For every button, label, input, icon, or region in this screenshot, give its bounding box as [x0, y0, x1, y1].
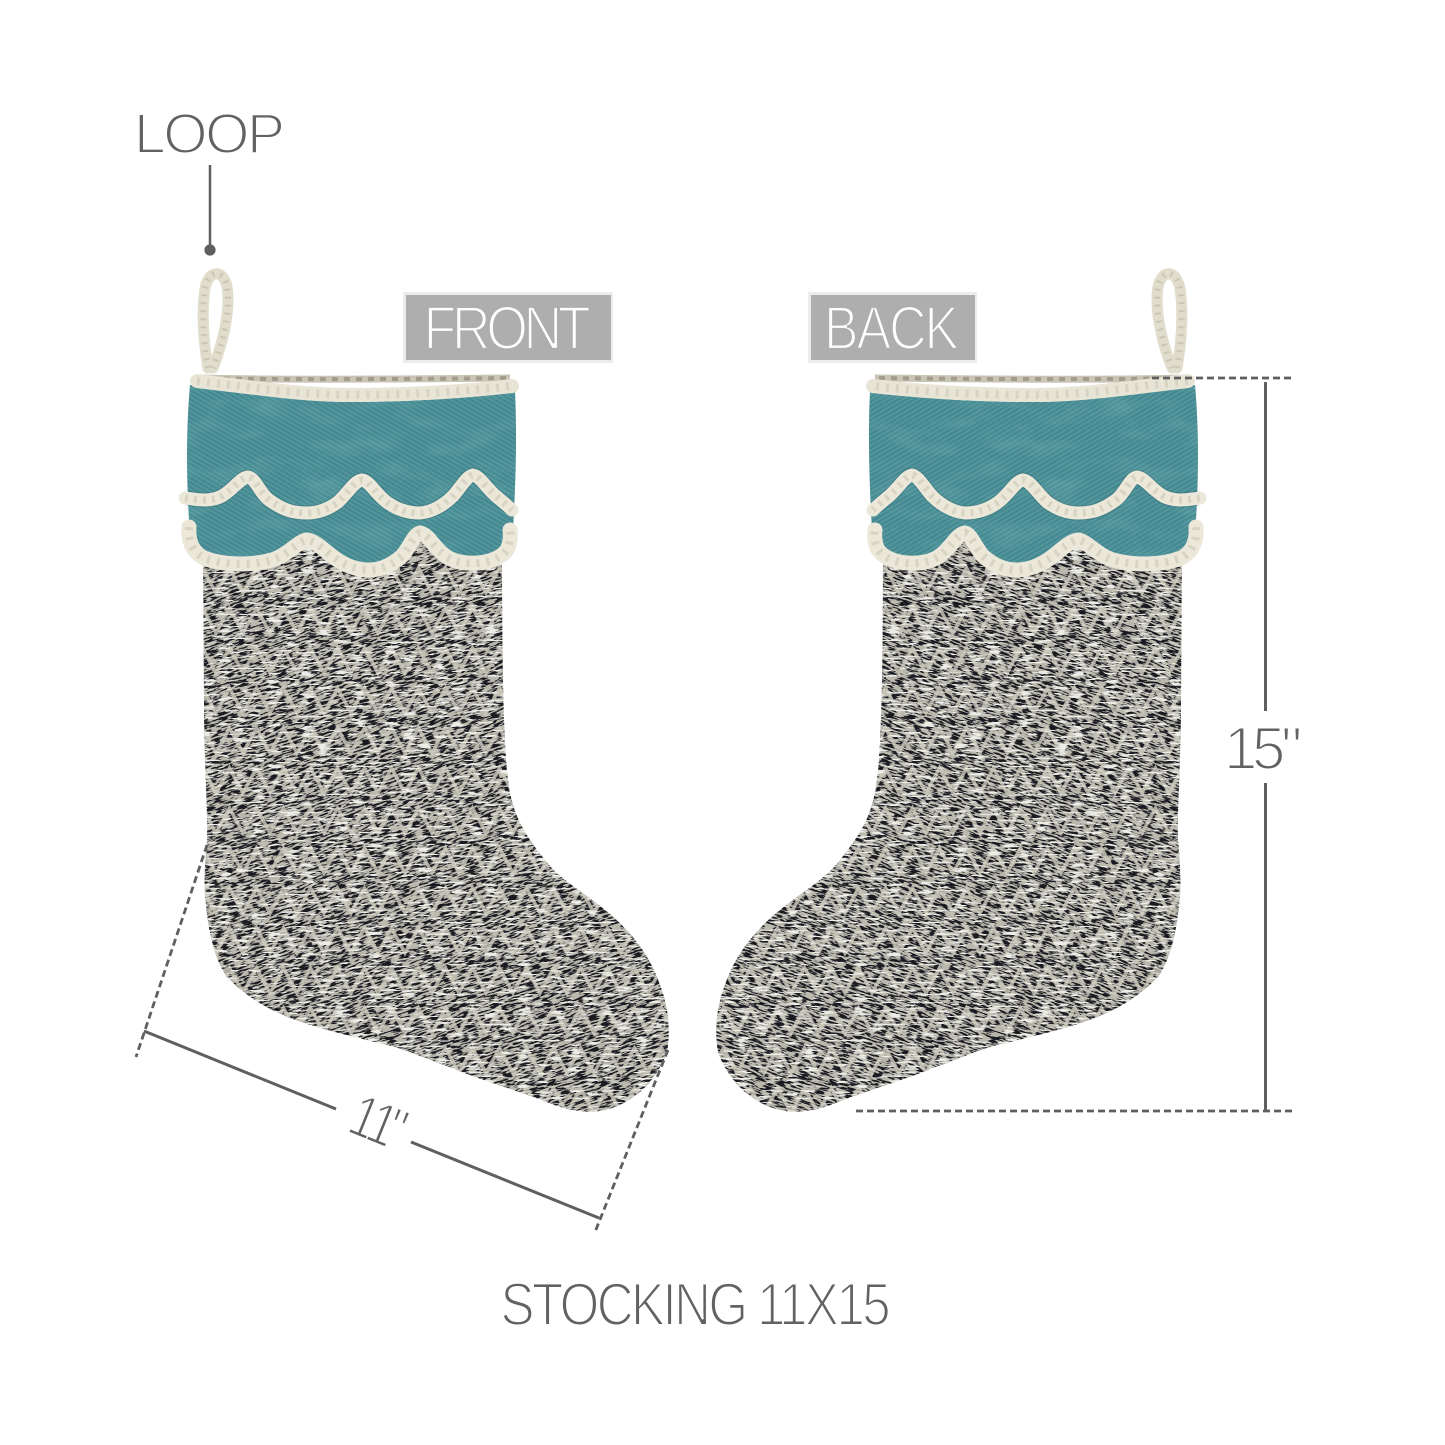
back top trim [873, 381, 1188, 395]
front cuff: teal band [187, 385, 516, 562]
stocking: back [473, 274, 1437, 1334]
loop leader line with dot [204, 165, 216, 256]
tag: front: FRONT [424, 295, 591, 363]
caption: STOCKING 11X15 [500, 1271, 891, 1338]
front hanging loop [203, 274, 228, 368]
front lower scallop trim [189, 527, 510, 570]
back body: knit fabric [716, 542, 1182, 1112]
dimension: width 11 inches [136, 845, 668, 1232]
tag: back: BACK [824, 294, 959, 362]
front rim cord [200, 378, 510, 379]
front upper scallop trim [185, 475, 512, 513]
height label: 15" [1224, 715, 1302, 782]
stocking: front [172, 268, 669, 1212]
back lower scallop trim [875, 527, 1196, 570]
back hanging loop [1157, 274, 1182, 368]
front top trim [197, 381, 512, 395]
back rim cord [875, 378, 1185, 379]
label: loop: LOOP [134, 102, 285, 166]
width label: 11" [340, 1081, 417, 1164]
back upper scallop trim [873, 475, 1200, 513]
front body: knit fabric [203, 542, 669, 1112]
back cuff: teal band [868, 385, 1198, 562]
